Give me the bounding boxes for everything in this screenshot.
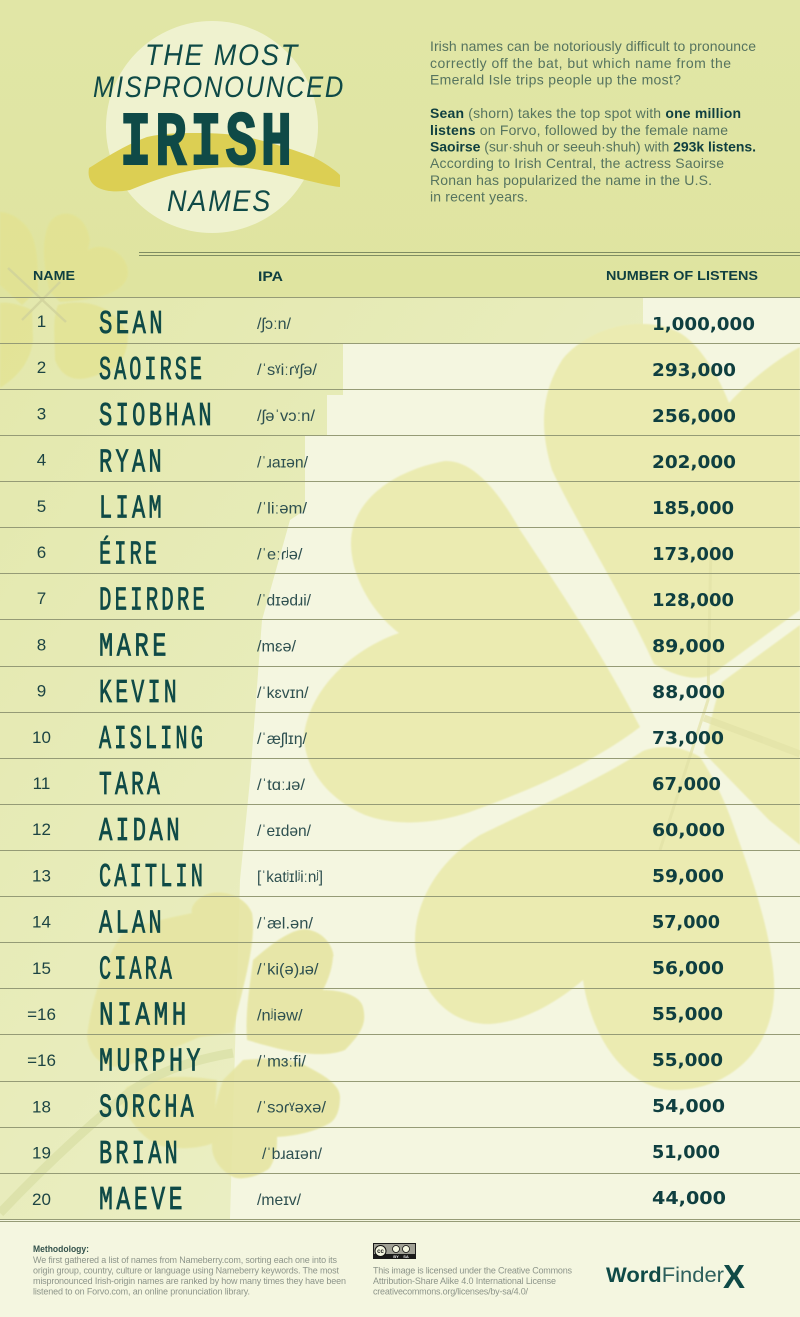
- license text: This image is licensed under the Creative Commons: [373, 1266, 572, 1276]
- row 14: 57,000: [652, 912, 720, 933]
- row 15: 15: [32, 959, 51, 978]
- license text: [373, 1266, 572, 1296]
- table column headers: NUMBER OF LISTENS: [606, 268, 758, 283]
- row 13: 13: [32, 866, 51, 885]
- row 6: 6: [37, 543, 46, 562]
- row 2: /ˈsˠiːɾˠʃə/: [257, 362, 318, 379]
- row 11: 67,000: [652, 774, 721, 795]
- row 4: /ˈɹaɪən/: [257, 454, 309, 471]
- creative commons badge: [373, 1243, 416, 1259]
- row 5: /ˈliːəm/: [257, 500, 308, 517]
- shamrock veins: [660, 540, 800, 850]
- WordFinderX logo: X: [723, 1258, 745, 1295]
- row 17: [27, 1044, 723, 1081]
- row 16: =16: [27, 1005, 56, 1024]
- row 12: [32, 813, 725, 850]
- row 3: SIOBHAN: [99, 398, 215, 435]
- row 14: [32, 905, 720, 942]
- row 12: AIDAN: [99, 813, 183, 850]
- row 11: [33, 767, 721, 804]
- table column headers: IPA: [258, 268, 283, 284]
- row 7: 128,000: [652, 590, 734, 611]
- row separators: [0, 298, 800, 1222]
- license text: creativecommons.org/licenses/by-sa/4.0/: [373, 1286, 528, 1296]
- top left shamrock background: [0, 212, 128, 388]
- methodology note: listened to on Forvo.com, an online pronunciation library.: [33, 1286, 250, 1296]
- row 16: [27, 998, 723, 1034]
- license text: Attribution-Share Alike 4.0 International License: [373, 1276, 556, 1286]
- row 12: 12: [32, 820, 51, 839]
- row 5: LIAM: [99, 490, 165, 527]
- row 1: [37, 306, 755, 343]
- row 20: [32, 1182, 726, 1219]
- row 9: [37, 675, 725, 712]
- row 9: KEVIN: [99, 675, 180, 712]
- row 17: /ˈmɜːfi/: [257, 1054, 307, 1071]
- row 3: 256,000: [652, 406, 736, 427]
- methodology note: origin group, country, culture or language using Nameberry keywords. The most: [33, 1266, 339, 1276]
- row 8: 89,000: [652, 636, 725, 657]
- row 8: MARE: [99, 629, 170, 666]
- row 7: 7: [37, 589, 46, 608]
- row 1: /ʃɔːn/: [257, 316, 292, 333]
- row 1: SEAN: [99, 306, 166, 343]
- row 4: RYAN: [99, 444, 165, 481]
- table column headers: NAME: [33, 268, 75, 283]
- intro text: According to Irish Central, the actress Saoirse: [430, 155, 724, 171]
- row 2: 293,000: [652, 360, 736, 381]
- bottom left shamrock stem: [0, 1053, 233, 1213]
- row 7: [37, 583, 734, 620]
- row 13: [ˈkatʲɪlʲiːnʲ]: [257, 869, 323, 886]
- header rules: [139, 252, 800, 256]
- row 18: 54,000: [652, 1096, 725, 1117]
- row 10: [32, 721, 724, 758]
- row 6: ÉIRE: [99, 536, 160, 574]
- row 14: 14: [32, 913, 51, 932]
- title line: irish: IRISH: [120, 101, 296, 187]
- row 20: 20: [32, 1190, 51, 1209]
- header band: [0, 0, 800, 297]
- row 8: /mɛə/: [257, 639, 297, 656]
- intro text: Emerald Isle trips people up the most?: [430, 72, 681, 88]
- row 16: 55,000: [652, 1004, 723, 1025]
- title circle: [106, 21, 318, 233]
- row 19: 19: [32, 1144, 51, 1163]
- row 9: /ˈkɛvɪn/: [257, 685, 309, 702]
- row 17: 55,000: [652, 1050, 723, 1071]
- row 3: [37, 398, 736, 435]
- title block: [89, 21, 345, 233]
- row 14: /ˈæl.ən/: [257, 915, 314, 932]
- row 14: ALAN: [99, 905, 165, 942]
- intro text: in recent years.: [430, 188, 528, 204]
- row 13: 59,000: [652, 866, 724, 887]
- row 10: AISLING: [99, 721, 206, 758]
- creative commons badge: cc: [377, 1249, 384, 1255]
- row 15: [32, 951, 724, 988]
- row 15: CIARA: [99, 951, 175, 988]
- title line: the most: THE MOST: [145, 39, 300, 72]
- intro text: correctly off the bat, but which name from the: [430, 55, 731, 71]
- row 18: SORCHA: [99, 1090, 197, 1127]
- row 15: 56,000: [652, 958, 724, 979]
- row 4: 4: [37, 451, 46, 470]
- bottom left shamrock background: [87, 892, 364, 1178]
- row 2: SAOIRSE: [99, 352, 205, 389]
- methodology note: mispronounced Irish-origin names are ranked by how many times they have been: [33, 1276, 346, 1286]
- row 3: /ʃəˈvɔːn/: [257, 408, 316, 425]
- row 17: =16: [27, 1051, 56, 1070]
- intro text: Ronan has popularized the name in the U.S.: [430, 172, 712, 188]
- row 13: [32, 859, 724, 896]
- row 9: 88,000: [652, 682, 725, 703]
- row 2: [37, 352, 736, 389]
- row 13: CAITLIN: [99, 859, 206, 896]
- row 19: BRIAN: [99, 1136, 181, 1173]
- row 4: [37, 444, 736, 481]
- row 18: /ˈsɔɾˠəxə/: [257, 1100, 327, 1117]
- row 6: [37, 536, 734, 574]
- row 6: 173,000: [652, 544, 734, 565]
- row 15: /ˈki(ə)ɹə/: [257, 961, 319, 978]
- row 2: 2: [37, 358, 46, 377]
- intro text: Sean (shorn) takes the top spot with one million: [430, 105, 741, 121]
- row 4: 202,000: [652, 452, 736, 473]
- methodology note: [33, 1244, 346, 1296]
- row 5: 5: [37, 497, 46, 516]
- row 20: 44,000: [652, 1188, 726, 1209]
- title line: mispronounced: MISPRONOUNCED: [93, 71, 345, 104]
- row 19: 51,000: [652, 1142, 720, 1163]
- table column headers: [33, 268, 758, 284]
- intro text: Irish names can be notoriously difficult to pronounce: [430, 38, 756, 54]
- title line: names: NAMES: [167, 185, 272, 218]
- row 7: /ˈdɪədɹi/: [257, 593, 312, 610]
- row 10: 73,000: [652, 728, 724, 749]
- row 19: [32, 1136, 720, 1173]
- row 9: 9: [37, 682, 46, 701]
- row 20: /meɪv/: [257, 1192, 302, 1209]
- intro text: [430, 38, 756, 204]
- WordFinderX logo: WordFinder: [606, 1264, 724, 1287]
- row 8: 8: [37, 635, 46, 654]
- row 20: MAEVE: [99, 1182, 186, 1219]
- row 6: /ˈeːɾʲə/: [257, 546, 303, 564]
- row 5: 185,000: [652, 498, 734, 519]
- row 16: /nʲiəw/: [257, 1008, 303, 1024]
- row 1: 1,000,000: [652, 314, 755, 335]
- creative commons badge: BY: [393, 1254, 399, 1259]
- left tinted panel behind table: [0, 297, 643, 1219]
- row 18: [32, 1090, 725, 1127]
- intro text: listens on Forvo, followed by the female name: [430, 122, 728, 138]
- top left shamrock veins: [8, 268, 66, 322]
- row 11: TARA: [99, 767, 163, 804]
- row 11: /ˈtɑːɹə/: [257, 777, 306, 794]
- WordFinderX logo: [606, 1258, 745, 1295]
- row 19: /ˈbɹaɪən/: [262, 1146, 323, 1163]
- row 8: [37, 629, 725, 666]
- row 16: NIAMH: [99, 998, 190, 1034]
- row 12: 60,000: [652, 820, 725, 841]
- yellow brush stroke: [89, 133, 340, 191]
- row 18: 18: [32, 1097, 51, 1116]
- row 1: 1: [37, 312, 46, 331]
- large shamrock background: [304, 324, 800, 1090]
- row 10: /ˈæʃlɪŋ/: [257, 731, 308, 748]
- creative commons badge: SA: [403, 1254, 409, 1259]
- row 3: 3: [37, 404, 46, 423]
- row 5: [37, 490, 734, 527]
- intro text: Saoirse (sur·shuh or seeuh·shuh) with 293k listens.: [430, 138, 756, 154]
- row 17: MURPHY: [99, 1044, 204, 1081]
- methodology note: We first gathered a list of names from Nameberry.com, sorting each one into its: [33, 1255, 338, 1265]
- row 10: 10: [32, 728, 51, 747]
- methodology note: Methodology:: [33, 1244, 89, 1254]
- row 7: DEIRDRE: [99, 583, 208, 620]
- row 11: 11: [33, 774, 50, 793]
- row 12: /ˈeɪdən/: [257, 823, 312, 840]
